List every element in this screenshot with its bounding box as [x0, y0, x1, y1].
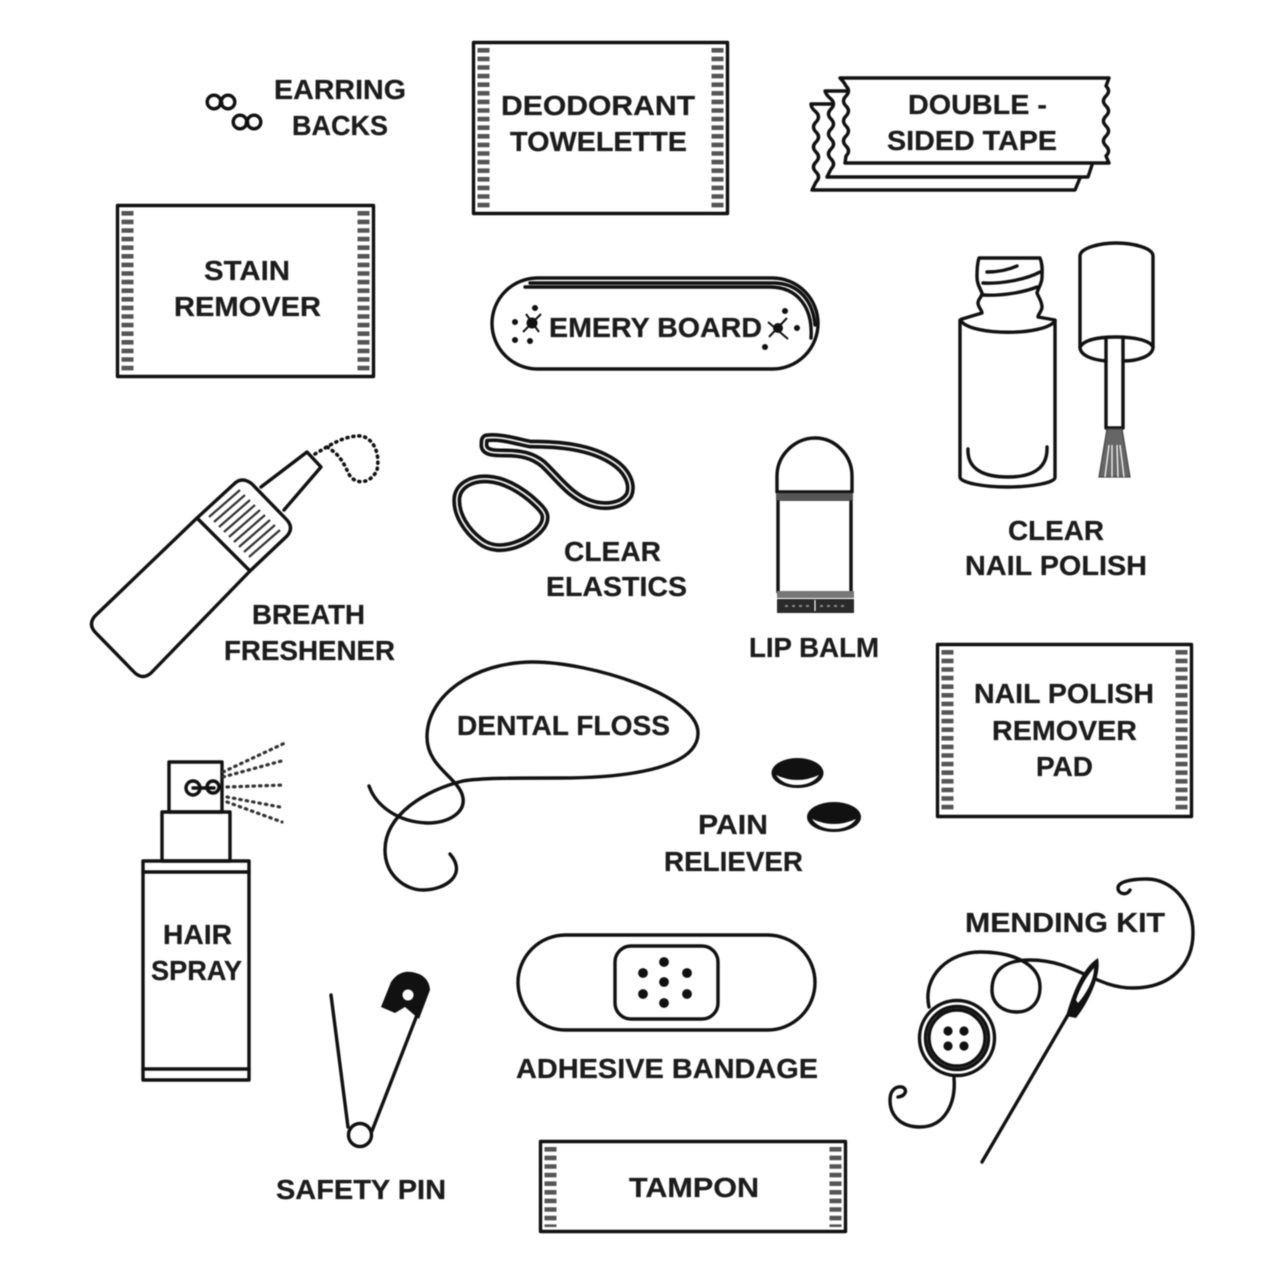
label: double-sided tape: DOUBLE -	[908, 89, 1047, 120]
tampon packet	[540, 1142, 846, 1232]
label: clear nail polish: CLEAR	[1008, 515, 1104, 546]
brush and cap	[1080, 243, 1153, 477]
label: clear nail polish: NAIL POLISH	[965, 550, 1147, 581]
label: nail polish remover pad: NAIL POLISH	[974, 678, 1154, 709]
icon: elastic bands	[457, 438, 630, 548]
label: deodorant towelette	[501, 90, 695, 157]
label: breath freshener: FRESHENER	[224, 635, 395, 666]
stain remover packet	[118, 206, 374, 376]
earring backs	[207, 74, 406, 141]
adhesive bandage	[516, 935, 818, 1084]
hair spray	[143, 743, 285, 1080]
label: safety pin: SAFETY PIN	[276, 1174, 446, 1205]
label: stain remover	[174, 255, 321, 322]
label: earring backs	[274, 74, 406, 141]
icon: bandage	[518, 935, 815, 1030]
breath freshener	[92, 436, 395, 676]
label: breath freshener: BREATH	[252, 599, 365, 630]
nail polish remover packet	[938, 644, 1192, 816]
label: pain reliever: RELIEVER	[664, 846, 803, 877]
label: nail polish remover pad	[974, 678, 1154, 782]
clear nail polish	[960, 243, 1153, 581]
bottle	[92, 436, 378, 676]
label: clear elastics	[546, 536, 687, 602]
sparkles	[512, 305, 800, 350]
label: double-sided tape: SIDED TAPE	[887, 125, 1057, 156]
label: clear elastics: CLEAR	[564, 536, 661, 567]
label: double-sided tape	[887, 89, 1057, 156]
safety pin	[276, 972, 446, 1205]
lip balm	[749, 438, 879, 663]
label: hair spray: SPRAY	[151, 955, 242, 986]
icon: pills	[772, 758, 861, 832]
label: pain reliever: PAIN	[698, 809, 768, 840]
label: mending kit: MENDING KIT	[965, 907, 1165, 938]
clear elastics	[457, 438, 687, 602]
deodorant towelette packet	[474, 42, 728, 214]
label: clear nail polish	[965, 515, 1147, 581]
label: emery board: EMERY BOARD	[549, 312, 762, 343]
label: earring backs: EARRING	[274, 74, 406, 105]
bottle	[960, 258, 1055, 487]
label: stain remover: STAIN	[204, 255, 290, 286]
label: nail polish remover pad: PAD	[1036, 751, 1093, 782]
label: adhesive bandage: ADHESIVE BANDAGE	[516, 1053, 818, 1084]
icon: floss string	[369, 662, 698, 890]
label: earring backs: BACKS	[292, 110, 388, 141]
label: hair spray	[151, 919, 242, 986]
label: pain reliever	[664, 809, 803, 877]
icon: earring backs	[207, 95, 261, 129]
mending kit	[890, 879, 1193, 1162]
icon: thread, button and needle	[890, 879, 1193, 1162]
label: nail polish remover pad: REMOVER	[992, 715, 1137, 746]
emery board	[492, 278, 818, 369]
icon: lip balm tube	[776, 438, 854, 613]
dental floss	[369, 662, 698, 890]
pain reliever	[664, 758, 861, 877]
label: stain remover: REMOVER	[174, 291, 321, 322]
label: clear elastics: ELASTICS	[546, 571, 687, 602]
label: dental floss: DENTAL FLOSS	[457, 710, 670, 741]
label: tampon: TAMPON	[629, 1172, 759, 1203]
icon: spray can	[143, 743, 285, 1080]
double-sided tape	[811, 78, 1109, 190]
label: lip balm: LIP BALM	[749, 632, 879, 663]
label: deodorant towelette: TOWELETTE	[510, 126, 687, 157]
icon: safety pin	[331, 972, 430, 1146]
label: hair spray: HAIR	[163, 919, 232, 950]
label: breath freshener	[224, 599, 395, 666]
label: deodorant towelette: DEODORANT	[501, 90, 695, 121]
